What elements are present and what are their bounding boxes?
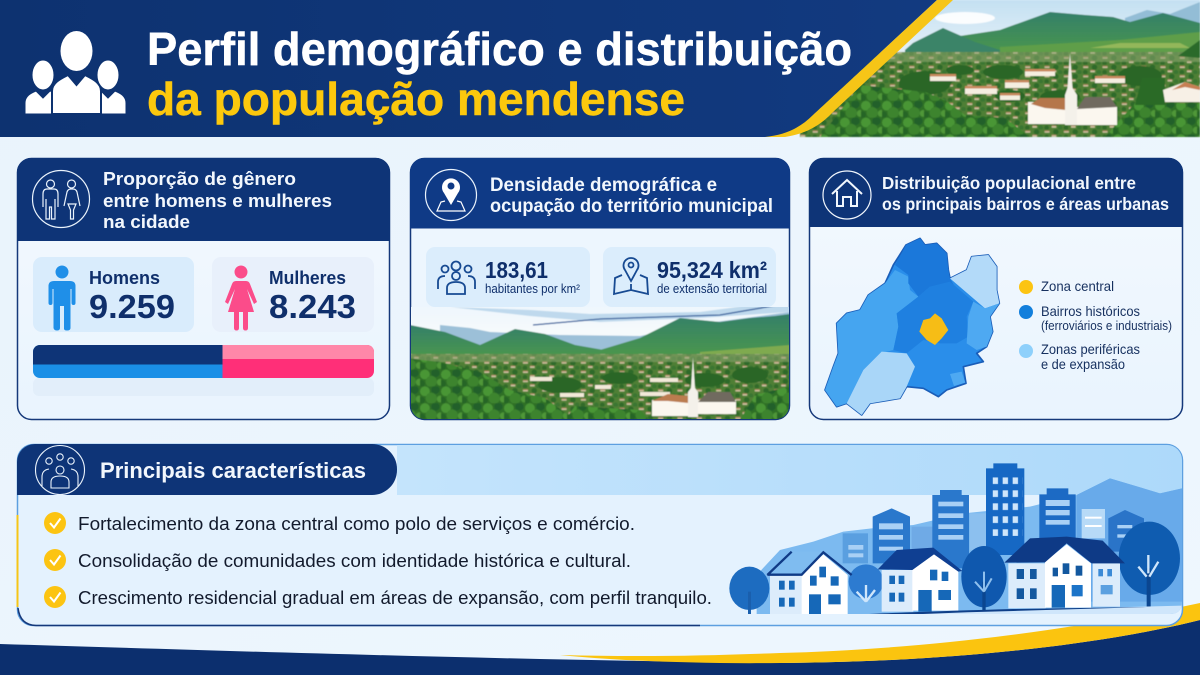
card: men: [33, 257, 194, 332]
section tab: [17, 444, 397, 495]
card: density: [426, 247, 590, 307]
card: women: [212, 257, 374, 332]
icon: man and woman outlines: [32, 170, 90, 228]
panel: density: [405, 158, 795, 420]
card: men: Homens: [89, 268, 160, 288]
trees: [729, 522, 1180, 618]
panel header: [410, 158, 790, 228]
card: women: Mulheres: [269, 268, 346, 288]
house 2: [878, 548, 962, 612]
panel heading: Distribuição populacional entre: [882, 173, 1136, 193]
ground: [874, 606, 1182, 614]
photo: valley and town: [405, 300, 795, 420]
header banner: [0, 0, 1200, 137]
panel: gender proportion: [17, 158, 390, 420]
map legend: Zona central: [1041, 278, 1114, 294]
panel header: [17, 158, 390, 241]
town houses: [930, 71, 1125, 100]
section heading: Principais características: [100, 458, 366, 483]
panel heading: na cidade: [103, 211, 190, 232]
card: density: 183,61: [485, 257, 548, 283]
panel header: [809, 158, 1183, 227]
house 1: [767, 552, 852, 618]
map legend: Zonas periféricas: [1041, 341, 1140, 357]
map legend: (ferroviários e industriais): [1041, 319, 1172, 333]
card: area: 95,324 km²: [657, 257, 767, 283]
panel: neighbourhood distribution: [809, 158, 1183, 420]
gender proportion bar: [33, 345, 374, 396]
icon: group of people: [25, 31, 126, 114]
icon: map and pin: [614, 258, 648, 294]
house 3: [1004, 537, 1125, 608]
panel heading: [103, 168, 332, 232]
icon: people: [438, 262, 475, 294]
panel heading: [490, 175, 773, 217]
footer wave: [0, 603, 1200, 675]
city illustration: [729, 463, 1182, 614]
map legend: [1019, 278, 1172, 372]
list of characteristics: [44, 512, 712, 608]
card: area: de extensão territorial: [657, 282, 767, 296]
panel heading: Densidade demográfica e: [490, 175, 717, 196]
icon: woman: [225, 266, 257, 330]
map of districts: [825, 238, 999, 415]
icon: map pin: [426, 170, 476, 220]
icon: community: [36, 446, 84, 494]
title: [147, 23, 852, 125]
item 3: Crescimento residencial gradual em áreas de expansão, com perfil tranquilo.: [78, 588, 712, 608]
card: density: habitantes por km²: [485, 282, 580, 296]
map legend: Bairros históricos: [1041, 303, 1140, 319]
card: women: 8.243: [269, 288, 356, 325]
panel heading: entre homens e mulheres: [103, 190, 332, 211]
icon: house: [823, 171, 871, 219]
item 1: Fortalecimento da zona central como polo de serviços e comércio.: [78, 514, 635, 534]
panel heading: ocupação do território municipal: [490, 196, 773, 217]
background hills: [757, 478, 1182, 615]
item 2: Consolidação de comunidades com identidade histórica e cultural.: [78, 551, 631, 571]
panel: main characteristics: [16, 444, 1182, 626]
church building: [1028, 53, 1117, 125]
church: [652, 357, 736, 417]
title: Perfil demográfico e distribuição: [147, 23, 852, 75]
town houses: [530, 377, 678, 397]
map legend: e de expansão: [1041, 356, 1125, 372]
panel heading: os principais bairros e áreas urbanas: [882, 194, 1169, 214]
card: men: 9.259: [89, 288, 175, 325]
title: da população mendense: [147, 73, 685, 125]
card: area: [603, 247, 776, 307]
tree clumps: [899, 65, 1162, 104]
background buildings: [843, 463, 1144, 568]
tree clumps: [538, 367, 768, 393]
panel heading: Proporção de gênero: [103, 168, 296, 189]
icon: man: [48, 266, 76, 330]
panel heading: [882, 173, 1169, 214]
header photo: mountain town: [800, 0, 1200, 137]
